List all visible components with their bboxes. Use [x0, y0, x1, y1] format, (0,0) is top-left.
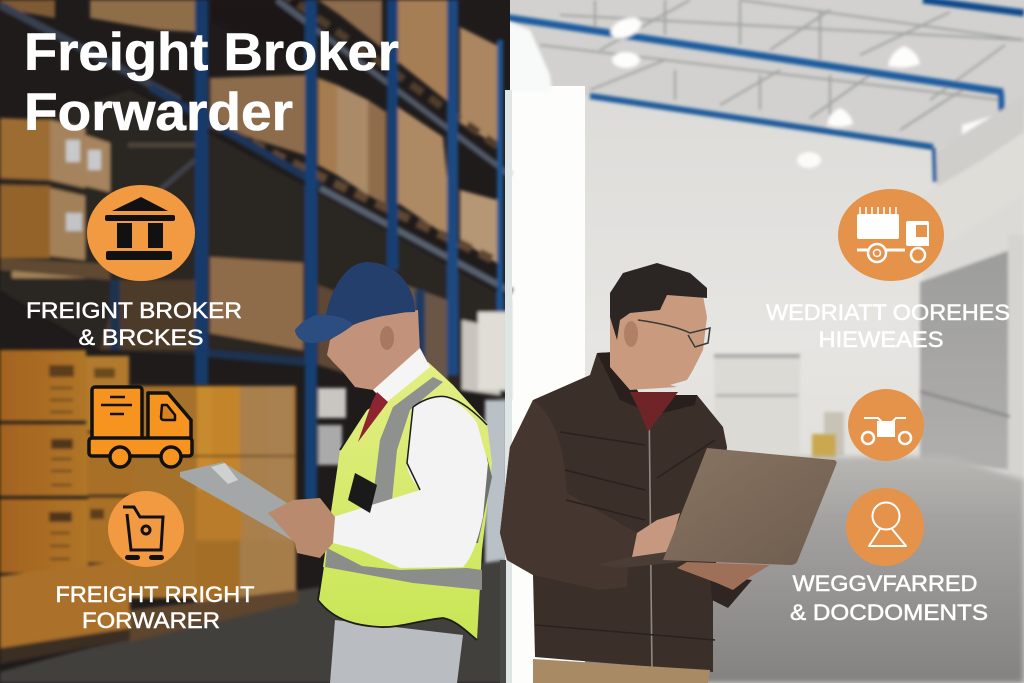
stacked cartons, front left: [0, 350, 298, 664]
jacket arm: [500, 400, 637, 590]
laptop lid: [663, 448, 837, 565]
vest reflective stripes: [370, 377, 443, 522]
label: brokers: & BRCKES: [78, 325, 204, 350]
glasses: [638, 320, 710, 347]
laptop base: [597, 548, 680, 568]
warehouse floor strip: [500, 90, 512, 683]
title: Forwarder: [24, 83, 293, 142]
vest edge piping: [318, 408, 477, 640]
icon: small vehicle: [848, 389, 924, 461]
title: [24, 23, 399, 142]
floor: [0, 560, 504, 683]
clipboard: [180, 462, 300, 543]
icon: truck, white: [838, 189, 944, 281]
trousers: [533, 659, 710, 683]
worker trousers: [330, 620, 463, 683]
vest: [318, 362, 492, 640]
red shirt: [630, 392, 678, 432]
collar: [373, 348, 430, 402]
lower hand: [677, 562, 770, 590]
top shelf boxes: [0, 0, 55, 18]
worker head: [327, 310, 420, 390]
typing hand: [632, 513, 680, 557]
uprights: [195, 0, 208, 385]
title: Freight Broker: [24, 23, 399, 82]
icon: shopping cart: [108, 491, 184, 567]
label: top right line one: WEDRIATT OOREHES: [766, 300, 1010, 325]
neck and face: [610, 290, 707, 390]
label: freight broker: FREIGNT BROKER: [26, 298, 242, 323]
ear: [624, 321, 638, 347]
hair: [610, 263, 707, 340]
jacket sleeve cuff: [710, 575, 752, 608]
worker in safety vest: [180, 262, 492, 683]
cap: [295, 262, 415, 343]
distant items behind workers: [318, 388, 346, 418]
label: forwarder: FORWARER: [82, 608, 220, 633]
beams: [277, 0, 510, 175]
icon: person outline: [846, 488, 924, 566]
label: top right line two: HIEWEAES: [818, 327, 944, 352]
left shelf boxes: [0, 118, 50, 180]
warehouse background: left racking: [0, 0, 512, 683]
icon: delivery truck: [89, 387, 192, 467]
pallets under shelves: [280, 0, 500, 148]
label: freight right: FREIGHT RRIGHT: [56, 582, 254, 607]
jacket: [500, 352, 727, 672]
ear: [380, 326, 394, 350]
label: bottom right line two: & DOCDOMENTS: [790, 600, 988, 625]
vest pocket: [348, 473, 377, 513]
man with laptop: [500, 263, 837, 683]
collar lining: [597, 352, 697, 415]
label: bottom right line one: WEGGVFARRED: [792, 571, 978, 596]
shirt sleeve: [333, 396, 488, 568]
hands: [268, 498, 335, 558]
icon: bank building: [87, 185, 195, 281]
tie: [358, 392, 388, 442]
warehouse background: right hall: [503, 0, 1024, 683]
